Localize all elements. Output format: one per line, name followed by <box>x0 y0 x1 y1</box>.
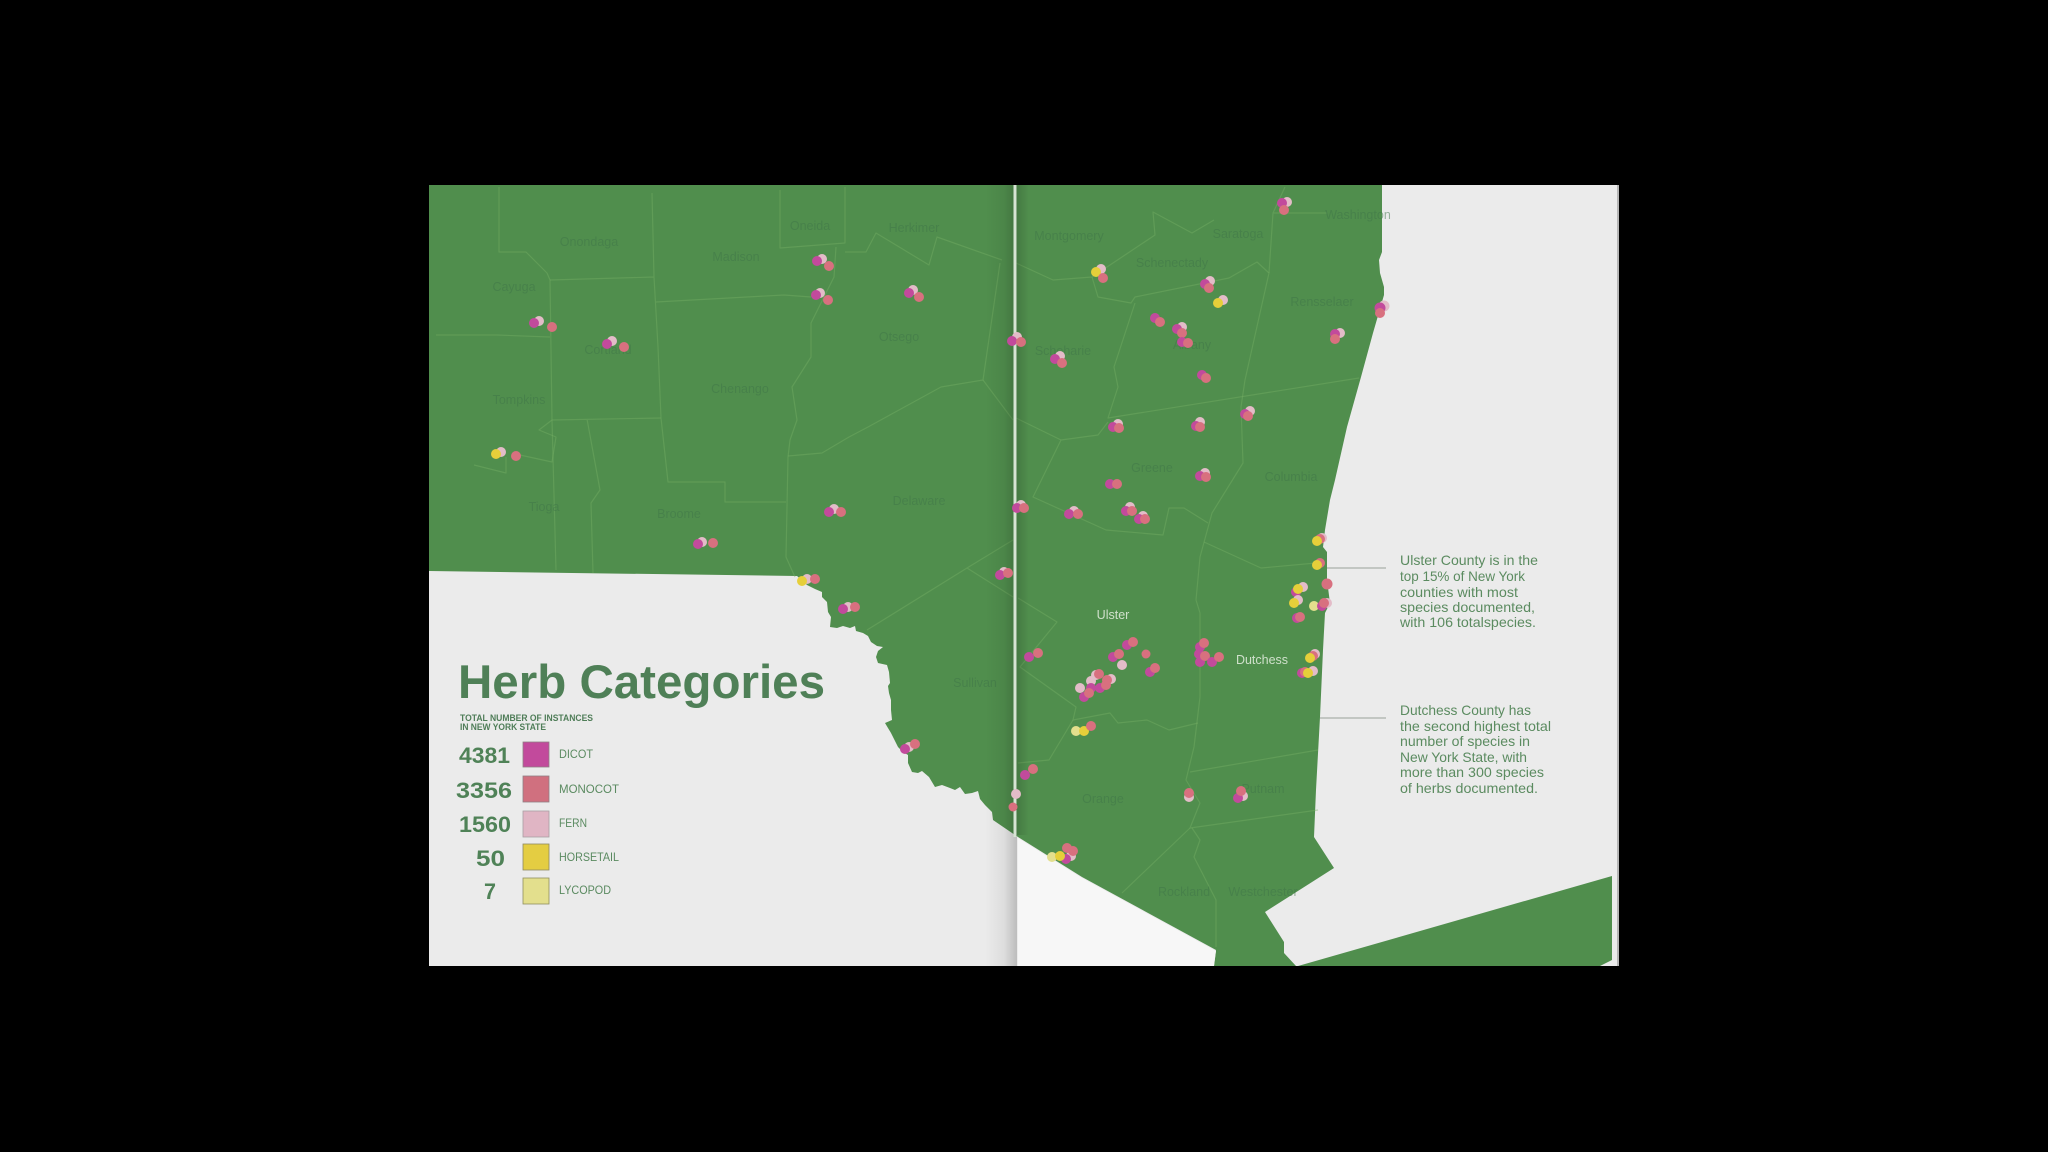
county names: Herkimer <box>889 221 939 235</box>
county names: Onondaga <box>560 235 618 249</box>
county borders <box>436 187 1359 947</box>
legend row: dicot: 4381 <box>459 743 510 768</box>
county names: Schenectady <box>1136 256 1209 270</box>
legend row: dicot: DICOT <box>559 747 594 761</box>
county names: Dutchess <box>1236 653 1288 667</box>
legend subtitle: TOTAL NUMBER OF INSTANCES <box>460 713 593 723</box>
legend row: fern <box>459 811 587 837</box>
county names: Sullivan <box>953 676 997 690</box>
county names: Rockland <box>1158 885 1210 899</box>
legend subtitle: IN NEW YORK STATE <box>460 722 546 732</box>
county names: Madison <box>712 250 760 264</box>
legend row: lycopod: LYCOPOD <box>559 883 611 897</box>
callout: Dutchess County: Dutchess County has <box>1400 702 1531 718</box>
callout: Ulster County: counties with most <box>1400 584 1518 600</box>
county names: Putnam <box>1241 782 1285 796</box>
county names: Montgomery <box>1034 229 1104 243</box>
county names <box>492 208 1391 899</box>
callout: Ulster County: Ulster County is in the <box>1400 552 1538 568</box>
legend row: lycopod <box>484 878 611 904</box>
land shape: main region <box>429 185 1384 966</box>
callout: Dutchess County: more than 300 species <box>1400 764 1544 780</box>
callout: Ulster County: top 15% of New York <box>1400 568 1526 584</box>
map: New York counties landmass <box>429 185 1612 966</box>
dots: Ulster and Dutchess clusters <box>1075 637 1224 702</box>
county names: Orange <box>1082 792 1124 806</box>
legend row: monocot <box>456 776 620 803</box>
dots: eastern edge <box>1289 533 1332 678</box>
county names: Westchester <box>1228 885 1298 899</box>
county names: Schoharie <box>1035 344 1091 358</box>
county names: Columbia <box>1265 470 1317 484</box>
legend row: dicot <box>459 742 594 768</box>
dots: southern counties <box>1047 721 1248 864</box>
legend row: horsetail <box>476 844 619 871</box>
county names: Greene <box>1131 461 1173 475</box>
dots: west counties <box>491 254 1013 754</box>
county names: Chenango <box>711 382 769 396</box>
county names: Tioga <box>529 500 559 514</box>
county names: Otsego <box>879 330 919 344</box>
callout: Ulster County <box>1327 552 1538 630</box>
panel: printed spread <box>429 185 1619 966</box>
dots: along the spine <box>1007 332 1043 812</box>
occurrence dots <box>491 197 1390 864</box>
legend <box>456 742 620 904</box>
county names: Tompkins <box>493 393 545 407</box>
callout: Ulster County: species documented, <box>1400 599 1535 615</box>
county names: Washington <box>1325 208 1391 222</box>
legend row: fern: FERN <box>559 816 587 830</box>
legend row: monocot: MONOCOT <box>559 782 620 796</box>
county names: Broome <box>657 507 701 521</box>
callout: Dutchess County: New York State, with <box>1400 749 1527 765</box>
legend row: horsetail: 50 <box>476 846 505 871</box>
legend row: horsetail: HORSETAIL <box>559 850 619 864</box>
callout: Dutchess County: the second highest total <box>1400 718 1551 734</box>
callout: Dutchess County <box>1320 702 1551 796</box>
callout: Ulster County: with 106 totalspecies. <box>1399 614 1536 630</box>
legend subtitle <box>460 713 593 732</box>
callout: Dutchess County: number of species in <box>1400 733 1530 749</box>
legend row: lycopod: 7 <box>484 879 496 904</box>
county names: Delaware <box>893 494 945 508</box>
callout: Dutchess County: of herbs documented. <box>1400 780 1538 796</box>
dots: north east counties <box>1050 197 1390 524</box>
county names: Albany <box>1173 338 1212 352</box>
county names: Oneida <box>790 219 830 233</box>
title: Herb Categories <box>458 655 825 708</box>
county names: Cayuga <box>492 280 536 294</box>
legend row: monocot: 3356 <box>456 778 512 803</box>
land shape: southeast strip <box>1298 876 1612 966</box>
county names: Ulster <box>1097 608 1129 622</box>
county names: Saratoga <box>1213 227 1263 241</box>
county names: Cortland <box>584 343 632 357</box>
county names: Rensselaer <box>1290 295 1354 309</box>
book spine shading <box>985 185 1216 966</box>
legend row: fern: 1560 <box>459 812 511 837</box>
